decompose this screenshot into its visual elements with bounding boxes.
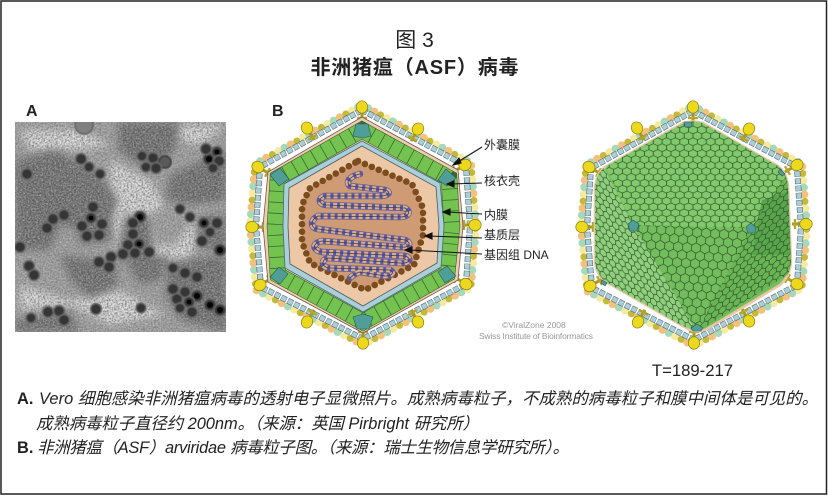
copyright note (479, 320, 593, 341)
caption: Vero 细胞感染非洲猪瘟病毒的透射电子显微照片。成熟病毒粒子，不成熟的病毒粒子和膜中间体是可见的。 (39, 390, 818, 408)
surface proteins ring (581, 106, 807, 346)
title: 非洲猪瘟（ASF）病毒 (310, 56, 518, 79)
label arrows (405, 147, 482, 254)
outer envelope (263, 117, 463, 333)
inner membrane (283, 141, 444, 312)
caption: 非洲猪瘟（ASF）arviridae 病毒粒子图。（来源：瑞士生物信息学研究所）。 (37, 438, 569, 457)
figure number: 图 3 (395, 29, 434, 52)
copyright note: ©ViralZone 2008 (502, 320, 566, 330)
caption A line 1: A. (17, 390, 33, 408)
panel label B: B (272, 103, 284, 120)
structure labels: 核衣壳 (484, 173, 520, 188)
matrix layer (288, 146, 439, 306)
structure labels: 基因组 DNA (484, 248, 549, 262)
copyright note: Swiss Institute of Bioinformatics (479, 331, 593, 341)
caption A line 2: 成熟病毒粒子直径约 200nm。（来源：英国 Pirbright 研究所） (36, 414, 479, 433)
large yellow spikes (246, 101, 481, 349)
T number label: T=189-217 (652, 361, 733, 380)
capsid vertices (270, 124, 456, 329)
core protein beads (302, 161, 423, 290)
diagram: virus exterior capsid (576, 101, 812, 349)
panel label A: A (26, 103, 38, 120)
pentamers (601, 122, 785, 331)
surface proteins ring (250, 105, 476, 345)
capsid outline (595, 122, 791, 331)
capsid layer (275, 130, 452, 322)
caption (17, 390, 818, 457)
structure labels: 基质层 (484, 228, 520, 242)
capsid facets (590, 118, 795, 332)
structure labels: 内膜 (484, 208, 508, 222)
genome core (302, 161, 423, 290)
caption B: B. (17, 439, 33, 457)
structure labels: 外囊膜 (484, 137, 520, 152)
large yellow spikes (576, 101, 812, 349)
panel A: electron micrograph (14, 116, 226, 332)
DNA helix (312, 174, 409, 278)
structure labels (484, 137, 549, 262)
diagram: virus cross section (246, 101, 481, 349)
